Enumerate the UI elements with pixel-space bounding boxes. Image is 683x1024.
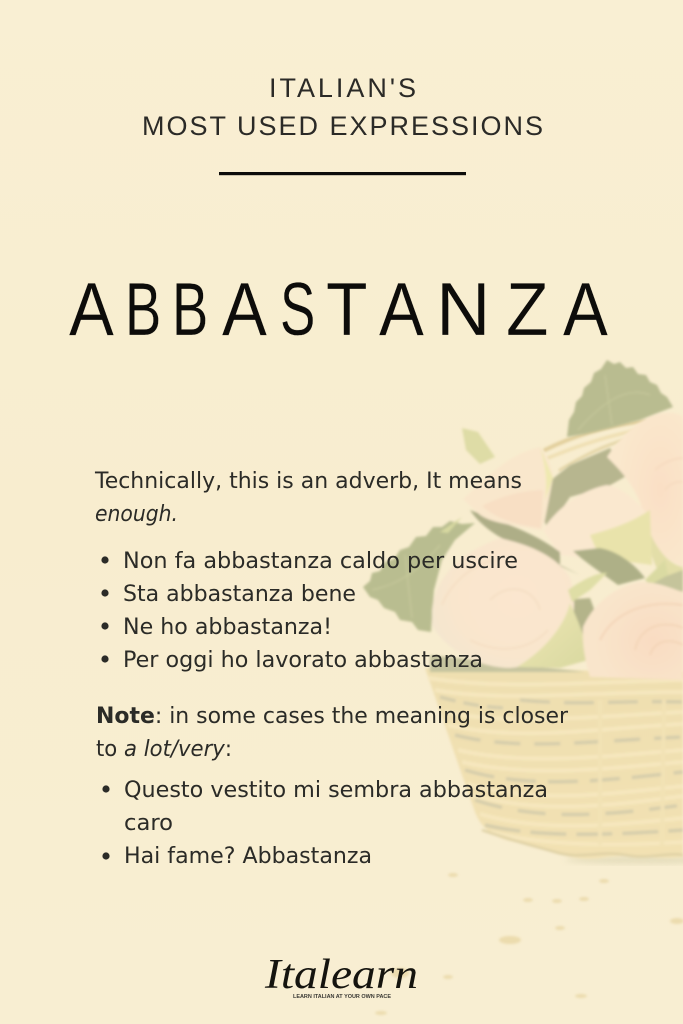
- title divider: [219, 172, 466, 175]
- logo: Italearn: [264, 952, 418, 998]
- subtitle: [142, 73, 543, 141]
- note text: [96, 703, 569, 762]
- example list two: [102, 777, 548, 869]
- basket: [425, 421, 683, 859]
- main word: A: [378, 268, 423, 352]
- main word: B: [172, 268, 208, 352]
- main word: A: [68, 268, 113, 352]
- intro text: [94, 468, 522, 527]
- intro text: Technically, this is an adverb, It means: [94, 468, 522, 494]
- note text: Note: in some cases the meaning is closer: [96, 703, 569, 729]
- example list one: Per oggi ho lavorato abbastanza: [123, 647, 483, 673]
- rose sepals: [517, 603, 588, 668]
- small stem leaf: [440, 517, 462, 533]
- rose large centre: [432, 538, 574, 668]
- example list one: Sta abbastanza bene: [123, 581, 356, 607]
- example list one: [101, 548, 518, 673]
- main word: A: [222, 268, 267, 352]
- main word: A: [563, 268, 608, 352]
- intro text: enough.: [95, 501, 178, 527]
- basket handle: [545, 421, 645, 470]
- main word: Z: [506, 268, 548, 352]
- small leaf: [462, 428, 495, 464]
- rose bottom right: [583, 582, 683, 680]
- subtitle: ITALIAN'S: [269, 73, 416, 103]
- main word: S: [280, 268, 315, 352]
- table shade: [565, 856, 683, 864]
- example list two: Hai fame? Abbastanza: [124, 843, 372, 869]
- note text: to a lot/very:: [96, 736, 232, 762]
- leaf left: [363, 521, 475, 632]
- basket body: [425, 668, 683, 859]
- foliage between lower roses: [565, 598, 600, 640]
- example list two: Questo vestito mi sembra abbastanza: [124, 777, 548, 803]
- example list one: Ne ho abbastanza!: [123, 614, 332, 640]
- flowers and leaves: [363, 360, 683, 680]
- main word: [68, 268, 608, 352]
- dark foliage behind top roses: [540, 448, 628, 530]
- leaf top: [567, 360, 673, 437]
- main word: B: [125, 268, 161, 352]
- main word: T: [326, 268, 367, 352]
- dark leaf streak under bud: [470, 510, 580, 575]
- rose bud top centre: [463, 447, 553, 531]
- example list one: Non fa abbastanza caldo per uscire: [123, 548, 518, 574]
- logo: LEARN ITALIAN AT YOUR OWN PACE: [293, 994, 391, 1000]
- subtitle: MOST USED EXPRESSIONS: [142, 111, 543, 141]
- rose top right: [607, 413, 683, 567]
- main word: N: [436, 268, 491, 352]
- gold confetti on the table: [375, 873, 683, 1015]
- rose middle right: [543, 485, 652, 563]
- example list two: caro: [124, 810, 173, 836]
